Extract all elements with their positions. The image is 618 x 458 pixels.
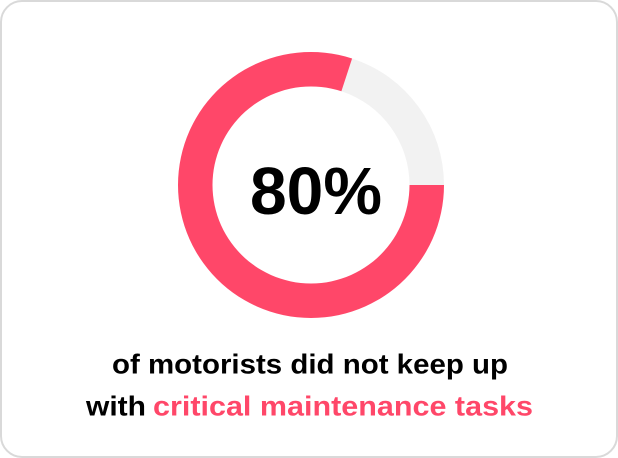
- caption line 1: of motorists did not keep up: [112, 348, 508, 380]
- caption line 2: [85, 390, 533, 422]
- percentage value: 80%: [250, 154, 382, 229]
- donut value segment 80%: [178, 52, 444, 318]
- caption: [85, 348, 533, 422]
- caption word: with: with: [85, 390, 146, 422]
- donut remainder segment 20%: [341, 58, 444, 185]
- donut chart: [178, 52, 444, 318]
- caption highlight: critical maintenance tasks: [153, 390, 533, 422]
